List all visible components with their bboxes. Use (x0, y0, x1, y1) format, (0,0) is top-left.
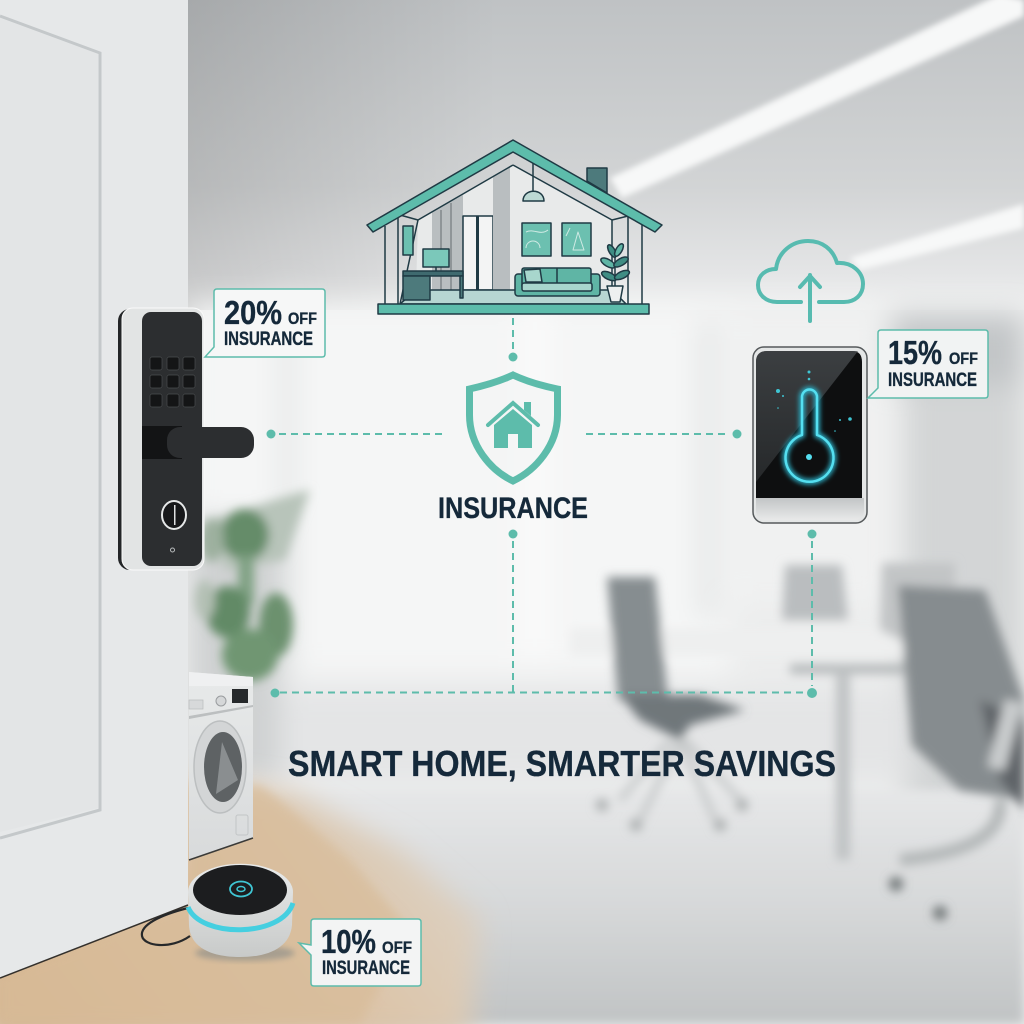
washing machine (189, 672, 253, 860)
discount: 20% (224, 294, 282, 331)
house glyph (488, 402, 538, 448)
connector nodes (266, 352, 817, 698)
roof (367, 140, 662, 232)
blurred plant (195, 490, 310, 681)
ceiling light strips (610, 0, 1024, 270)
curtains and window (432, 166, 510, 290)
interior walls (385, 165, 642, 304)
connector lines (279, 318, 812, 692)
off: OFF (949, 349, 978, 368)
smart speaker (142, 864, 295, 961)
insurance: INSURANCE (322, 958, 410, 979)
title: SMART HOME, SMARTER SAVINGS (288, 743, 836, 784)
blurred desk and chairs (570, 563, 1024, 920)
smart door lock (118, 308, 254, 570)
insurance label: INSURANCE (438, 492, 588, 525)
door (0, 0, 188, 978)
discount: 15% (888, 334, 942, 371)
keypad (150, 357, 195, 407)
wood floor near door (0, 782, 410, 1024)
house base (378, 304, 649, 314)
house illustration (367, 140, 662, 314)
floor (400, 290, 626, 304)
callout: 10% off (299, 919, 421, 986)
fingerprint ring (162, 501, 186, 552)
insurance: INSURANCE (888, 370, 977, 391)
off: OFF (382, 938, 412, 957)
smart thermostat (753, 347, 867, 523)
off: OFF (288, 309, 317, 328)
desk and monitor (403, 249, 463, 300)
thermometer glyph (786, 390, 834, 482)
potted plant (599, 242, 631, 302)
cloud upload icon (758, 241, 863, 321)
discount: 10% (321, 923, 376, 960)
callout: 15% off (868, 330, 988, 398)
sofa (515, 268, 600, 296)
lock handle (142, 426, 254, 459)
chimney (587, 168, 607, 193)
callout: 20% off (205, 289, 325, 357)
wall pictures (403, 223, 591, 256)
wood floor (0, 775, 480, 1024)
pendant lamp (523, 162, 544, 201)
insurance shield icon (470, 375, 558, 481)
screen reflection (756, 351, 858, 482)
sensor sparkles (776, 370, 852, 432)
insurance: INSURANCE (224, 329, 313, 350)
